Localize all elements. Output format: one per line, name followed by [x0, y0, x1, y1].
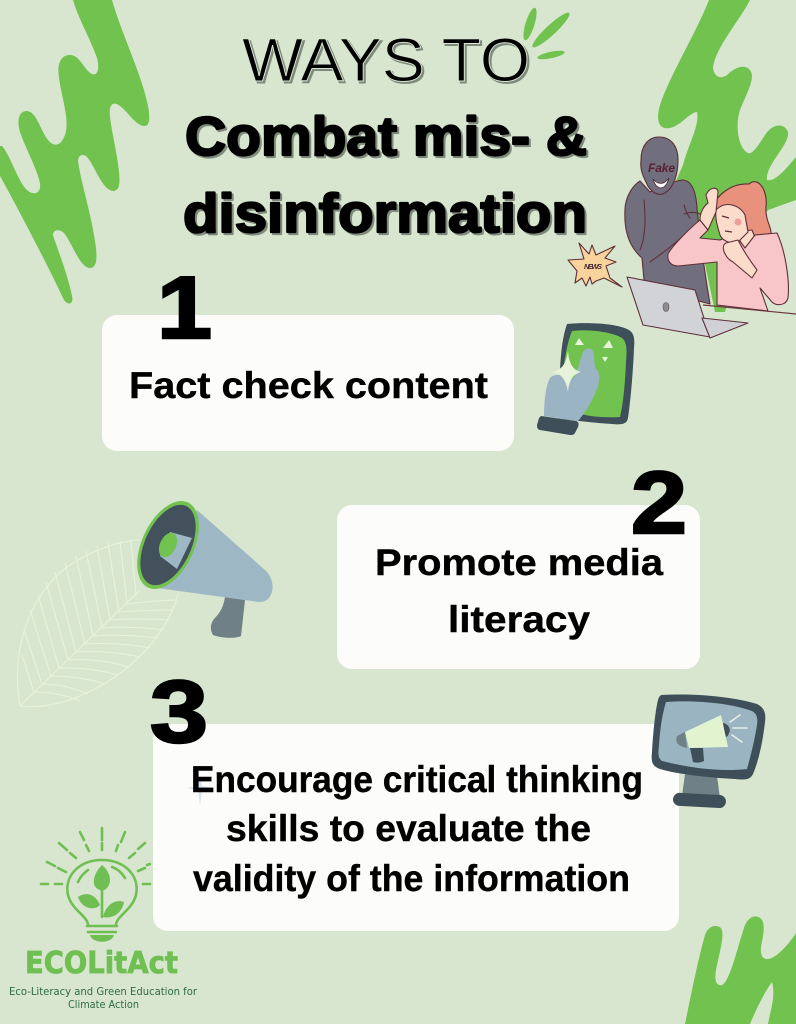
panel text line 3: validity of the information — [193, 858, 630, 899]
title: disinformation: disinformation — [183, 182, 587, 244]
woman in pink sweater — [668, 182, 788, 311]
logo: ecolitact — [9, 828, 197, 1011]
title: ways to: WAYS TO — [242, 26, 530, 94]
sprout accent beside title — [521, 6, 573, 61]
laptop — [627, 277, 748, 338]
icon: light bulb with sprout — [41, 828, 150, 942]
label: fake: Fake — [648, 161, 675, 175]
decorative leaf outline — [17, 540, 178, 707]
news burst — [568, 243, 622, 287]
panel text: Fact check content — [129, 365, 488, 406]
panel text line 1: Promote media — [375, 542, 663, 583]
man in dark hood — [625, 137, 710, 304]
green blob: bottom right — [685, 916, 796, 1024]
title: combat mis- and: Combat mis- & — [185, 105, 587, 167]
green blob: top right — [658, 0, 796, 312]
illustration: man and woman at a laptop with fake news — [568, 137, 796, 338]
number 3: 3 — [150, 662, 208, 761]
logo tagline line 1: Eco-Literacy and Green Education for — [9, 985, 197, 998]
label: news: NEWS — [584, 262, 602, 271]
icon: megaphone — [125, 491, 273, 638]
panel: media literacy — [337, 505, 700, 669]
green blob: top left — [0, 0, 149, 303]
number 1: 1 — [157, 258, 212, 357]
table line — [703, 305, 796, 314]
icon: tablet with pointing hand — [537, 323, 634, 435]
panel: fact check — [102, 315, 514, 451]
small sparkle — [186, 775, 214, 806]
number 2: 2 — [631, 453, 687, 552]
panel text line 1: Encourage critical thinking — [191, 759, 643, 800]
logo wordmark: ECOLitAct — [25, 946, 178, 981]
panel text line 2: skills to evaluate the — [226, 808, 591, 849]
icon: monitor with megaphone — [652, 694, 765, 808]
panel text line 2: literacy — [448, 599, 590, 640]
logo tagline line 2: Climate Action — [68, 998, 139, 1011]
panel: critical thinking — [153, 724, 679, 931]
